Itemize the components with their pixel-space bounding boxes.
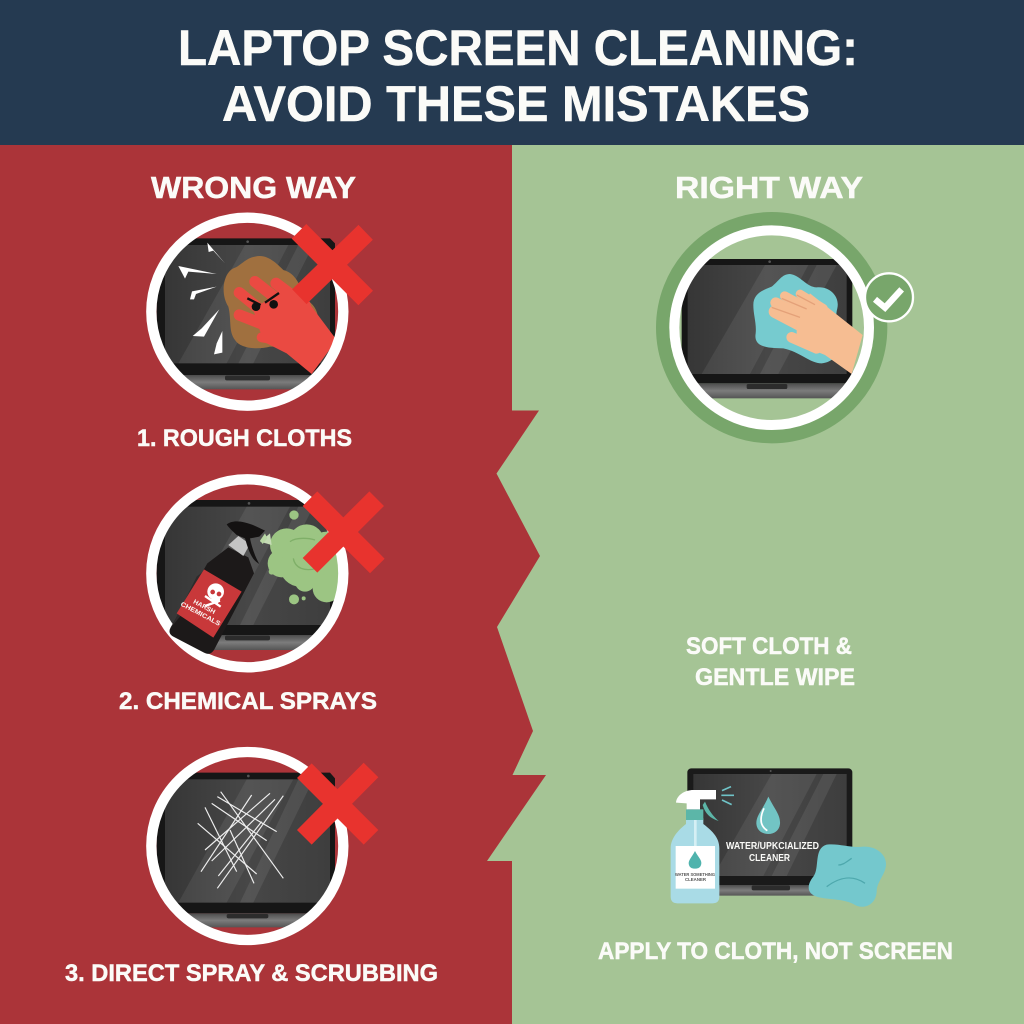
laptop and hand inside circle xyxy=(682,259,863,398)
white ring xyxy=(151,218,343,406)
caption: soft cloth and gentle wipe: GENTLE WIPE xyxy=(695,664,855,691)
illustration: rough cloth on screen xyxy=(151,218,366,406)
soft cloth xyxy=(809,844,886,907)
title text: AVOID THESE MISTAKES xyxy=(222,76,810,132)
illustration: scratched screen xyxy=(151,752,371,940)
title text: LAPTOP SCREEN CLEANING: xyxy=(178,20,858,76)
illustration: hand wiping screen with soft cloth xyxy=(663,219,913,437)
angry red hand xyxy=(239,282,337,374)
skull icon xyxy=(205,583,224,607)
laptop xyxy=(157,238,335,389)
bottle label text: HARSH xyxy=(192,599,217,616)
title banner xyxy=(0,0,1024,145)
panel: right way xyxy=(598,176,952,963)
panel: wrong way xyxy=(0,145,546,1024)
rough brown cloth xyxy=(224,256,318,348)
illustration: chemical spray xyxy=(151,479,377,667)
heading: wrong way: WRONG WAY xyxy=(151,170,356,205)
white ring xyxy=(151,752,343,940)
water drop xyxy=(756,797,780,834)
red x xyxy=(304,770,371,837)
bottle label text: WATER SOMETHING xyxy=(675,872,715,877)
chemical bottle xyxy=(169,521,267,654)
label: chemical sprays: 2. CHEMICAL SPRAYS xyxy=(119,688,377,715)
laptop xyxy=(157,500,335,650)
bottle label text xyxy=(675,872,715,882)
label: direct spray and scrubbing: 3. DIRECT SPRAY & SCRUBBING xyxy=(65,960,438,987)
banner background xyxy=(0,0,1024,145)
caption: soft cloth and gentle wipe: SOFT CLOTH & xyxy=(686,633,852,660)
scratches xyxy=(198,792,283,888)
label: rough cloths: 1. ROUGH CLOTHS xyxy=(137,425,352,452)
laptop xyxy=(685,768,855,896)
spray bottle xyxy=(671,790,719,903)
red jagged panel background xyxy=(0,145,546,1024)
illustration: spray bottle, laptop and cloth xyxy=(671,768,886,907)
spray lines xyxy=(721,787,734,805)
check badge xyxy=(865,273,913,321)
laptop screen label: WATER/UPKCIALIZED xyxy=(726,840,819,852)
chemical cloud xyxy=(260,510,345,604)
heading: right way: RIGHT WAY xyxy=(675,170,863,205)
bottle label text: CHEMICALS xyxy=(179,601,222,628)
bottle label text xyxy=(179,594,226,628)
scratch sparks xyxy=(178,243,225,354)
green outer ring xyxy=(663,219,881,437)
caption: soft cloth and gentle wipe xyxy=(686,633,855,691)
bottle label text: CLEANER xyxy=(685,877,707,882)
red x xyxy=(310,499,377,566)
laptop screen label xyxy=(726,840,819,864)
laptop screen label: CLEANER xyxy=(749,852,790,864)
white ring xyxy=(151,479,343,667)
red x xyxy=(299,231,366,298)
title text xyxy=(178,20,858,132)
caption: apply to cloth: APPLY TO CLOTH, NOT SCREEN xyxy=(598,938,953,965)
laptop xyxy=(157,773,335,927)
white ring xyxy=(674,230,869,425)
